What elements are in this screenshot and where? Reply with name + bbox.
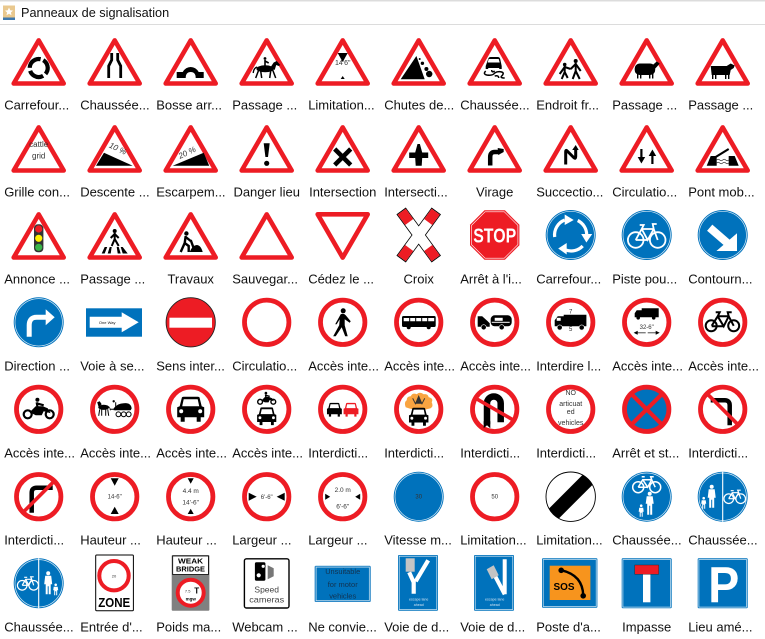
- label: Pont mob...: [688, 184, 755, 199]
- icon: for motor: [328, 580, 358, 589]
- sign: height limit warning: [308, 40, 375, 112]
- icon: [166, 40, 216, 84]
- sign: steep ascent: [156, 127, 226, 199]
- sign: road narrows: [80, 40, 150, 112]
- icon: [394, 40, 444, 84]
- icon: [546, 210, 596, 260]
- icon: [245, 300, 289, 344]
- label: Hauteur ...: [80, 532, 141, 547]
- icon: mgw: [186, 596, 196, 601]
- sign: escape lane right: [460, 555, 525, 634]
- icon: [624, 387, 669, 432]
- icon: [698, 210, 748, 260]
- icon: [168, 387, 213, 432]
- icon: [242, 214, 292, 258]
- sign: width limit metric: [308, 474, 367, 547]
- sign: length limit: [612, 300, 683, 373]
- icon: [546, 472, 595, 521]
- icon: [622, 210, 672, 260]
- sign: stop: [460, 210, 522, 286]
- icon: [90, 40, 140, 84]
- sign: segregated path pedestrians left: [688, 472, 758, 547]
- icon: [401, 211, 436, 259]
- sign: one way: [80, 308, 145, 373]
- icon: [320, 387, 365, 432]
- sign: shared path bike and pedestrians: [612, 472, 682, 547]
- sign: falling rocks: [384, 40, 454, 112]
- icon: 30: [415, 495, 423, 501]
- sign: slippery road: [460, 40, 530, 112]
- label: Interdicti...: [536, 445, 596, 460]
- sign: weak bridge weight limit: [156, 555, 221, 634]
- icon: 14'-6": [182, 500, 200, 507]
- icon: grid: [32, 152, 45, 160]
- icon: Speed: [254, 584, 279, 594]
- icon: [320, 300, 365, 344]
- label: Arrêt et st...: [612, 445, 679, 460]
- label: Sauvegar...: [232, 271, 298, 286]
- icon: [548, 387, 593, 432]
- icon: [318, 214, 368, 258]
- icon: [394, 127, 444, 170]
- icon: [396, 300, 441, 344]
- label: Intersection: [309, 184, 376, 199]
- label: Chaussée...: [460, 97, 530, 112]
- icon: vehicles: [558, 420, 584, 427]
- icon: palette star: [3, 6, 15, 20]
- sign: no heavy goods vehicles: [536, 300, 601, 373]
- icon: 6'-6": [261, 495, 273, 501]
- sign: keep left arrow: [688, 210, 753, 286]
- label: Passage ...: [688, 97, 753, 112]
- label: Ne convie...: [308, 619, 377, 634]
- sign: speed cameras: [232, 559, 298, 634]
- label: Virage: [476, 184, 513, 199]
- icon: escape lane: [485, 597, 504, 601]
- label: Hauteur ...: [156, 532, 217, 547]
- label: Accès inte...: [156, 445, 227, 460]
- sign: no U-turn: [460, 387, 520, 460]
- label: Travaux: [167, 271, 214, 286]
- sign: no stopping: [612, 387, 679, 460]
- icon: [242, 127, 292, 170]
- label: Circulatio...: [612, 184, 677, 199]
- sign: parking: [688, 556, 753, 634]
- sign: no vehicles: [232, 300, 297, 373]
- icon: [698, 472, 748, 522]
- label: Contourn...: [688, 271, 753, 286]
- sign: two way traffic: [612, 127, 677, 199]
- label: Webcam ...: [232, 619, 298, 634]
- sign: empty triangle: [232, 214, 298, 286]
- icon: 20: [112, 574, 117, 579]
- label: Vitesse m...: [384, 532, 452, 547]
- label: Limitation...: [308, 97, 375, 112]
- icon: [470, 40, 520, 84]
- sign: road works: [166, 214, 216, 286]
- icon: [90, 214, 140, 258]
- icon: [472, 387, 517, 432]
- icon: [92, 387, 137, 432]
- icon: P: [708, 556, 739, 613]
- sign: no caravans: [460, 300, 531, 373]
- label: Interdicti...: [688, 445, 748, 460]
- sign: cattle: [688, 40, 753, 112]
- icon: escape lane: [409, 597, 428, 601]
- label: Carrefour...: [4, 97, 69, 112]
- icon: [698, 40, 748, 84]
- sign: danger: [233, 127, 300, 199]
- icon: [474, 555, 514, 611]
- sign: no pedestrians: [308, 300, 379, 373]
- sign: no overtaking: [308, 387, 368, 460]
- sign: traffic lights: [4, 214, 70, 286]
- icon: [315, 566, 370, 602]
- icon: [16, 474, 61, 519]
- sign: double bend: [536, 127, 603, 199]
- icon: [14, 40, 64, 84]
- icon: [622, 127, 672, 170]
- sign: speed zone entry: [80, 555, 143, 634]
- icon: BRIDGE: [176, 566, 205, 573]
- label: Passage ...: [232, 97, 297, 112]
- icon: [546, 127, 596, 170]
- label: Accès inte...: [80, 445, 151, 460]
- icon: 7: [569, 309, 573, 315]
- sign: roundabout warning: [4, 40, 69, 112]
- icon: [166, 214, 216, 258]
- icon: 2.0 m: [335, 487, 351, 494]
- icon: 5: [569, 327, 573, 333]
- sign: no motor vehicles: [156, 387, 227, 460]
- icon: 7.5: [185, 588, 191, 593]
- icon: vehicles: [329, 591, 356, 600]
- label: Lieu amé...: [688, 619, 753, 634]
- sign: St Andrew cross: [401, 211, 436, 286]
- label: Direction ...: [4, 358, 70, 373]
- sign: no motor vehicles and motorcycles: [232, 387, 303, 460]
- sign: speed limit 50: [460, 474, 527, 547]
- icon: 14'6": [335, 60, 351, 67]
- icon: 14-6": [108, 495, 122, 501]
- label: Accès inte...: [460, 358, 531, 373]
- icon: [622, 472, 672, 522]
- label: Escarpem...: [156, 184, 226, 199]
- label: Succectio...: [536, 184, 603, 199]
- label: Limitation...: [536, 532, 603, 547]
- label: Circulatio...: [232, 358, 297, 373]
- label: Interdicti...: [384, 445, 444, 460]
- icon: [548, 300, 593, 344]
- label: Grille con...: [4, 184, 70, 199]
- icon: [700, 387, 745, 432]
- sign: height limit: [80, 474, 141, 547]
- sign: minimum speed: [384, 472, 452, 547]
- label: Annonce ...: [4, 271, 70, 286]
- sign: segregated path pedestrians right: [4, 558, 74, 634]
- sign: steep descent: [80, 127, 150, 199]
- icon: [14, 214, 64, 258]
- icon: [700, 300, 745, 344]
- icon: [396, 387, 441, 432]
- icon: [622, 558, 672, 608]
- title: Panneaux de signalisation: [21, 6, 169, 20]
- sign: width limit: [232, 474, 291, 547]
- icon: One Way: [99, 320, 115, 325]
- sign: bend: [470, 127, 520, 199]
- icon: 20 %: [176, 145, 197, 161]
- sign: no articulated vehicles: [536, 387, 596, 460]
- sign: national speed limit: [536, 472, 603, 547]
- icon: 4.4 m: [183, 488, 199, 495]
- icon: ZONE: [98, 595, 130, 610]
- icon: [166, 298, 215, 347]
- label: Endroit fr...: [536, 97, 599, 112]
- icon: WEAK: [178, 558, 203, 565]
- icon: [14, 297, 64, 347]
- icon: STOP: [473, 225, 516, 248]
- icon: [472, 300, 517, 344]
- label: Entrée d'...: [80, 619, 143, 634]
- label: Accès inte...: [308, 358, 379, 373]
- label: Bosse arr...: [156, 97, 222, 112]
- sign: humpback bridge: [156, 40, 222, 112]
- sign: unsuitable for motor vehicles: [308, 566, 377, 634]
- label: Poste d'a...: [536, 619, 601, 634]
- icon: ahead: [414, 603, 424, 607]
- icon: [242, 40, 292, 84]
- label: Chaussée...: [688, 532, 758, 547]
- label: Poids ma...: [156, 619, 221, 634]
- label: Chaussée...: [80, 97, 150, 112]
- icon: [698, 127, 748, 170]
- sign: no motorcycles: [4, 387, 75, 460]
- sign: sheep: [612, 40, 677, 112]
- icon: [14, 127, 64, 170]
- icon: 32-6": [640, 325, 654, 331]
- label: Arrêt à l'i...: [460, 271, 522, 286]
- label: Chaussée...: [612, 532, 682, 547]
- sign: opening bridge: [688, 127, 755, 199]
- label: Chaussée...: [4, 619, 74, 634]
- icon: SOS: [554, 582, 575, 593]
- sign: height limit metric: [156, 474, 217, 547]
- sign: pedestrian crossing: [80, 214, 145, 286]
- label: Voie à se...: [80, 358, 145, 373]
- sign: no left turn: [688, 387, 748, 460]
- label: Carrefour...: [536, 271, 601, 286]
- sign: give way: [308, 214, 374, 286]
- icon: [398, 555, 438, 611]
- label: Interdicti...: [308, 445, 368, 460]
- label: Passage ...: [80, 271, 145, 286]
- label: Interdicti...: [4, 532, 64, 547]
- icon: 10 %: [108, 141, 128, 157]
- icon: cattle: [29, 140, 49, 149]
- icon: [546, 40, 596, 84]
- icon: [318, 127, 368, 170]
- sign: school children: [536, 40, 599, 112]
- sign: no right turn: [4, 474, 64, 547]
- label: Accès inte...: [232, 445, 303, 460]
- icon: 50: [491, 495, 499, 501]
- sign: no explosives: [384, 387, 444, 460]
- label: Croix: [404, 271, 434, 286]
- label: Accès inte...: [4, 445, 75, 460]
- label: Piste pou...: [612, 271, 677, 286]
- label: Sens inter...: [156, 358, 225, 373]
- label: Descente ...: [80, 184, 150, 199]
- sign: escape lane left: [384, 555, 449, 634]
- sign: no entry: [156, 298, 225, 373]
- icon: [245, 387, 289, 432]
- label: Chutes de...: [384, 97, 454, 112]
- icon: 6'-6": [336, 504, 350, 511]
- label: Voie de d...: [460, 619, 525, 634]
- label: Impasse: [622, 619, 671, 634]
- icon: [172, 555, 209, 611]
- label: Cédez le ...: [308, 271, 374, 286]
- label: Voie de d...: [384, 619, 449, 634]
- icon: T: [194, 586, 199, 595]
- icon: NO: [565, 390, 577, 397]
- sign: crossroads: [309, 127, 376, 199]
- sign: horse riders: [232, 40, 297, 112]
- icon: cameras: [249, 594, 284, 604]
- sign: no horse drawn vehicles: [80, 387, 151, 460]
- label: Intersecti...: [384, 184, 448, 199]
- icon: [14, 558, 64, 608]
- icon: ed: [567, 409, 575, 416]
- label: Accès inte...: [612, 358, 683, 373]
- icon: [622, 40, 672, 84]
- label: Interdicti...: [460, 445, 520, 460]
- label: Accès inte...: [688, 358, 759, 373]
- sign: no cycling: [688, 300, 759, 373]
- sign: no buses: [384, 300, 455, 373]
- label: Largeur ...: [308, 532, 367, 547]
- sign: cycle path: [612, 210, 677, 286]
- icon: [320, 474, 365, 519]
- sign: dead end: [622, 558, 672, 634]
- sign: priority crossroads: [384, 127, 448, 199]
- sign: SOS emergency phone: [536, 558, 601, 634]
- icon: Unsuitable: [325, 567, 360, 576]
- icon: [168, 474, 213, 519]
- sign: turn right ahead: [4, 297, 70, 373]
- icon: [244, 559, 289, 608]
- icon: [470, 127, 520, 170]
- icon: [16, 387, 61, 432]
- sign: mandatory roundabout: [536, 210, 601, 286]
- label: Passage ...: [612, 97, 677, 112]
- label: Interdire l...: [536, 358, 601, 373]
- label: Largeur ...: [232, 532, 291, 547]
- icon: [96, 555, 133, 611]
- label: Danger lieu: [233, 184, 300, 199]
- header: palette title: [3, 6, 169, 20]
- icon: articuat: [559, 401, 582, 408]
- icon: ahead: [490, 603, 500, 607]
- label: Accès inte...: [384, 358, 455, 373]
- sign: cattle grid: [4, 127, 70, 199]
- label: Limitation...: [460, 532, 527, 547]
